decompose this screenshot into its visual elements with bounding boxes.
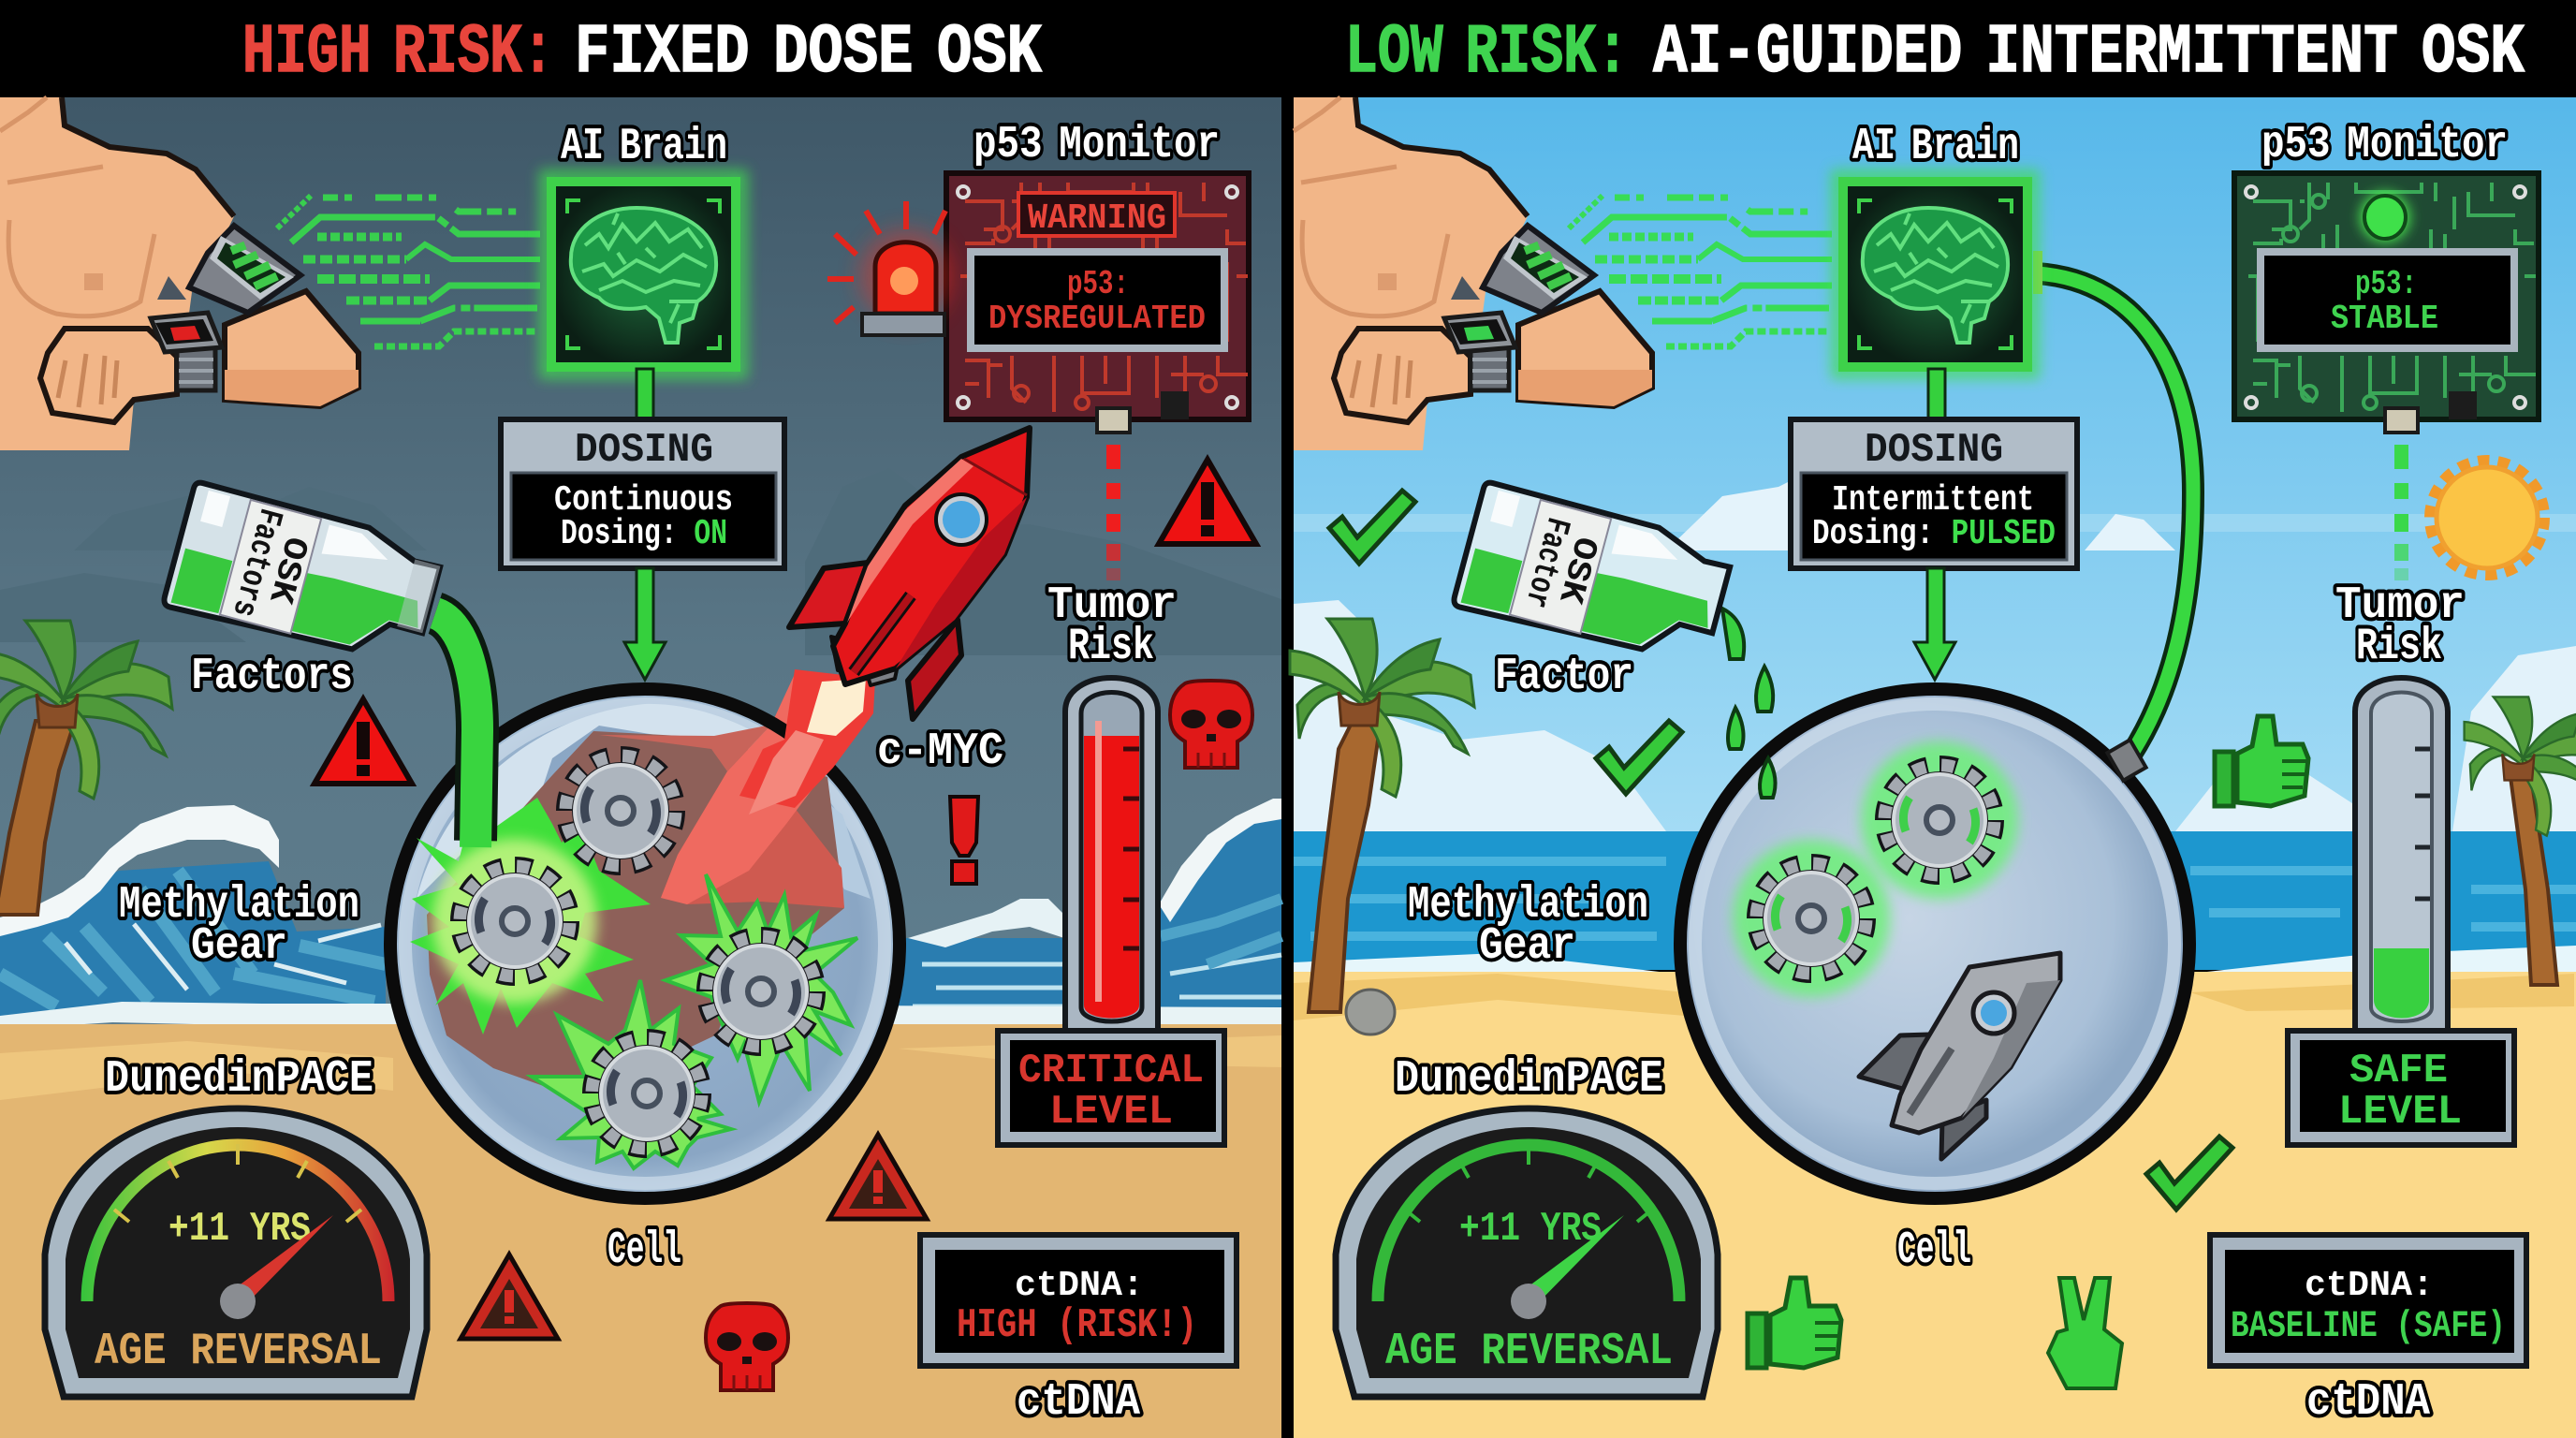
OSK factor bottle <box>1453 481 1735 672</box>
label: Cell: Cell <box>607 1225 681 1276</box>
c-MYC rocket <box>789 428 1030 719</box>
ctDNA box <box>2210 1235 2526 1366</box>
methylation gear <box>594 1041 699 1146</box>
alarm beacon <box>827 201 953 335</box>
OSK factor bottle: Factor <box>1516 513 1577 611</box>
biometric data streams <box>277 196 540 346</box>
critical level box: LEVEL <box>1049 1089 1173 1136</box>
label: c-MYC: c-MYC <box>877 726 1003 777</box>
dosing box: Dosing: PULSED <box>1812 514 2056 554</box>
label: ctDNA: ctDNA <box>2306 1377 2430 1428</box>
p53 monitor: DYSREGULATED <box>988 300 1206 338</box>
label: Methylation Gear: Methylation <box>1408 880 1648 931</box>
ctDNA box: ctDNA: <box>1015 1266 1144 1306</box>
label: Factors: Factors <box>191 652 353 702</box>
methylation gear <box>709 939 813 1044</box>
silent rocket <box>1859 953 2060 1159</box>
feedback tube from AI to cell <box>2033 251 2193 764</box>
dosing box: Dosing: ON <box>561 514 727 554</box>
thermometer <box>2355 678 2448 1033</box>
connector brain to dosing <box>1928 369 1945 421</box>
red exclamation mark <box>950 797 978 884</box>
arrow to cell <box>624 568 666 680</box>
OSK factors bottle: OSK <box>260 533 315 608</box>
warning triangle <box>461 1255 558 1339</box>
thermometer <box>1065 678 1158 1033</box>
OSK factors bottle <box>163 481 446 672</box>
label: Methylation Gear: Methylation <box>119 880 359 931</box>
warning triangle <box>315 699 412 784</box>
green burst <box>666 874 857 1102</box>
age reversal gauge <box>45 1108 427 1397</box>
peace hand <box>2048 1278 2122 1388</box>
biometric data streams <box>1569 196 1832 346</box>
age reversal gauge: AGE REVERSAL <box>1385 1327 1673 1377</box>
skull <box>706 1303 788 1390</box>
skull <box>1170 681 1252 768</box>
label: Methylation Gear: Gear <box>1479 921 1575 972</box>
methylation gear <box>1887 768 1992 873</box>
age reversal gauge <box>1336 1108 1718 1397</box>
p53 monitor: p53: <box>1067 265 1129 303</box>
critical level box: CRITICAL <box>1018 1048 1204 1094</box>
critical level box <box>998 1031 1224 1145</box>
arm with smart armband and watch <box>1294 97 1652 450</box>
p53 monitor: p53: <box>2355 265 2417 303</box>
label: Factor: Factor <box>1495 652 1633 702</box>
green pour stream <box>435 613 477 847</box>
OSK factor bottle: OSK <box>1550 533 1604 608</box>
check mark <box>2146 1137 2232 1210</box>
p53 monitor label: p53 Monitor <box>973 120 1220 170</box>
dosing box: DOSING <box>1865 427 2003 474</box>
safe level box <box>2288 1031 2514 1145</box>
flame exhaust over cell wall <box>739 669 875 814</box>
ctDNA box: BASELINE (SAFE) <box>2231 1306 2506 1348</box>
AI brain panel <box>1838 177 2032 372</box>
panel: high risk <box>0 97 1281 1438</box>
dosing box: DOSING <box>575 427 713 474</box>
connector brain to dosing <box>637 369 653 421</box>
panel: low risk <box>1290 97 2576 1438</box>
palm tree <box>0 621 172 915</box>
warning triangle <box>1159 460 1256 544</box>
label: AI Brain: AI Brain <box>561 122 727 172</box>
methylation gear <box>462 869 567 974</box>
dosing box <box>501 419 784 568</box>
cell with damaged contents <box>390 669 900 1198</box>
warning triangle <box>829 1135 927 1219</box>
p53 monitor <box>946 173 1249 433</box>
label: AI Brain: AI Brain <box>1852 122 2019 172</box>
label: ctDNA: ctDNA <box>1017 1377 1140 1428</box>
dosing box <box>1791 419 2077 568</box>
ctDNA box: HIGH (RISK!) <box>957 1302 1197 1349</box>
label: Tumor Risk: Risk <box>2356 622 2442 672</box>
title: left: FIXED DOSE OSK <box>575 14 1042 93</box>
label: Tumor Risk <box>2335 580 2465 672</box>
palm tree <box>1290 619 1474 1012</box>
methylation gear <box>568 758 673 863</box>
age reversal gauge: AGE REVERSAL <box>95 1327 382 1377</box>
label: Tumor Risk <box>1047 580 1177 672</box>
label: Methylation Gear <box>119 880 359 972</box>
thumbs up <box>1748 1278 1841 1368</box>
ctDNA box <box>920 1235 1237 1366</box>
label: Methylation Gear: Gear <box>191 921 287 972</box>
tube connector <box>2107 740 2146 781</box>
OSK factors bottle: Factors <box>224 505 289 621</box>
safe level box: LEVEL <box>2338 1089 2462 1136</box>
thumbs up <box>2215 716 2308 806</box>
ctDNA box: ctDNA: <box>2305 1266 2434 1306</box>
label: DunedinPACE: DunedinPACE <box>1395 1054 1663 1105</box>
green drops <box>1722 609 1776 798</box>
palm tree <box>2465 697 2576 985</box>
age reversal gauge: +11 YRS <box>1459 1206 1602 1253</box>
label: Tumor Risk: Tumor <box>2335 580 2465 631</box>
dosing box: Continuous <box>554 480 733 521</box>
rock <box>1346 990 1395 1034</box>
title: left: HIGH RISK: <box>242 14 554 93</box>
title: right: LOW RISK: <box>1345 14 1629 93</box>
check mark <box>1329 491 1415 564</box>
red dashed signal line <box>1106 445 1120 580</box>
dosing box: Intermittent <box>1832 480 2034 521</box>
gear glow <box>1733 840 1890 997</box>
p53 monitor <box>2234 173 2539 433</box>
title: left <box>242 14 1042 93</box>
green burst <box>532 980 731 1168</box>
label: Methylation Gear <box>1408 880 1648 972</box>
p53 monitor label: p53 Monitor <box>2261 120 2508 170</box>
label: Tumor Risk: Tumor <box>1047 580 1177 631</box>
green dashed signal line <box>2394 445 2408 580</box>
AI brain panel <box>547 177 740 372</box>
methylation gear <box>1759 866 1864 971</box>
p53 monitor: WARNING <box>1028 198 1166 239</box>
p53 monitor: STABLE <box>2331 300 2438 338</box>
gear glow <box>1861 741 2018 899</box>
check mark <box>1596 721 1682 794</box>
label: Cell: Cell <box>1897 1225 1971 1276</box>
age reversal gauge: +11 YRS <box>168 1206 311 1253</box>
arm with smart armband and watch <box>0 97 359 450</box>
cell with healthy contents <box>1680 689 2189 1198</box>
label: Tumor Risk: Risk <box>1068 622 1154 672</box>
safe level box: SAFE <box>2349 1048 2448 1094</box>
sun <box>2431 462 2543 574</box>
arrow to cell <box>1914 568 1955 680</box>
green burst <box>410 798 651 1034</box>
label: DunedinPACE: DunedinPACE <box>105 1054 373 1105</box>
